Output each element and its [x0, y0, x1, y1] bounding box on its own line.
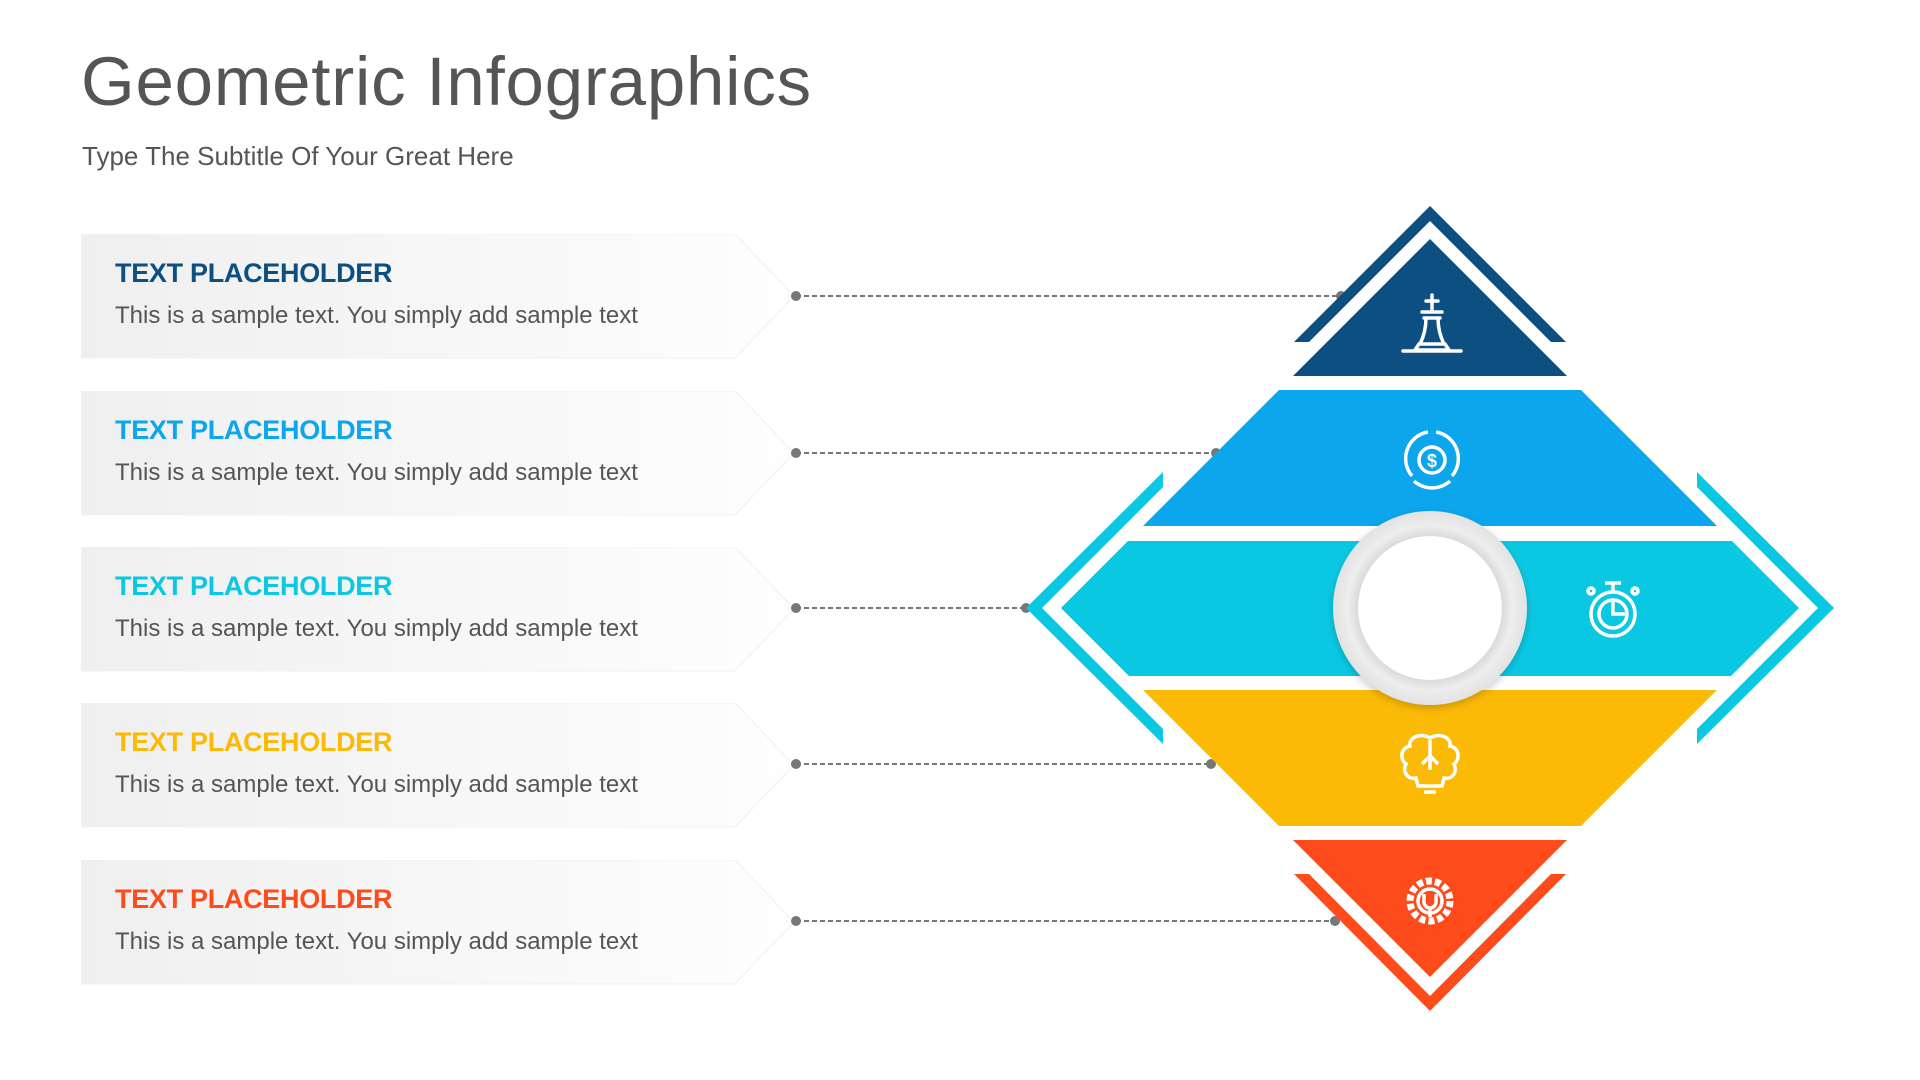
band 2: blue: [1143, 390, 1717, 526]
panel: item 4: TEXT PLACEHOLDER: [115, 727, 392, 757]
panel: item 1: [81, 234, 792, 358]
panel: item 2: TEXT PLACEHOLDER: [115, 415, 392, 445]
connector lines: [791, 291, 1346, 926]
icon: dollar chart: $: [1427, 451, 1437, 471]
panel: item 5: TEXT PLACEHOLDER: [115, 884, 392, 914]
panel: item 1: This is a sample text. You simply add sample text: [115, 302, 638, 329]
center circle: [1333, 511, 1527, 705]
band 4: yellow: [1143, 690, 1717, 826]
chevron: right: [1697, 472, 1834, 744]
band 1: dark triangle: [1293, 239, 1567, 376]
icon: stopwatch: [1588, 583, 1638, 636]
panel: item 1: TEXT PLACEHOLDER: [115, 258, 392, 288]
icon: dollar chart: [1406, 432, 1458, 488]
icon: brain: [1402, 736, 1458, 792]
band 3: cyan: [1061, 541, 1799, 676]
panel: item 5: This is a sample text. You simply add sample text: [115, 928, 638, 955]
panel: item 2: [81, 391, 792, 516]
panel: item 5: [81, 860, 792, 984]
panel: item 2: This is a sample text. You simply add sample text: [115, 459, 638, 486]
icon: gear: [1410, 881, 1450, 921]
chevron: left: [1026, 472, 1163, 744]
band 5: orange triangle: [1293, 840, 1567, 977]
panel: item 3: This is a sample text. You simply add sample text: [115, 615, 638, 642]
title: Geometric Infographics: [81, 43, 812, 120]
panel: item 4: [81, 703, 792, 828]
chevron: bottom: [1294, 874, 1566, 1011]
panel: item 4: This is a sample text. You simply add sample text: [115, 771, 638, 798]
icon: chess king: [1403, 295, 1461, 351]
subtitle: Type The Subtitle Of Your Great Here: [82, 141, 514, 171]
panel: item 3: TEXT PLACEHOLDER: [115, 571, 392, 601]
chevron: top: [1294, 206, 1566, 342]
panel: item 3: [81, 547, 792, 672]
